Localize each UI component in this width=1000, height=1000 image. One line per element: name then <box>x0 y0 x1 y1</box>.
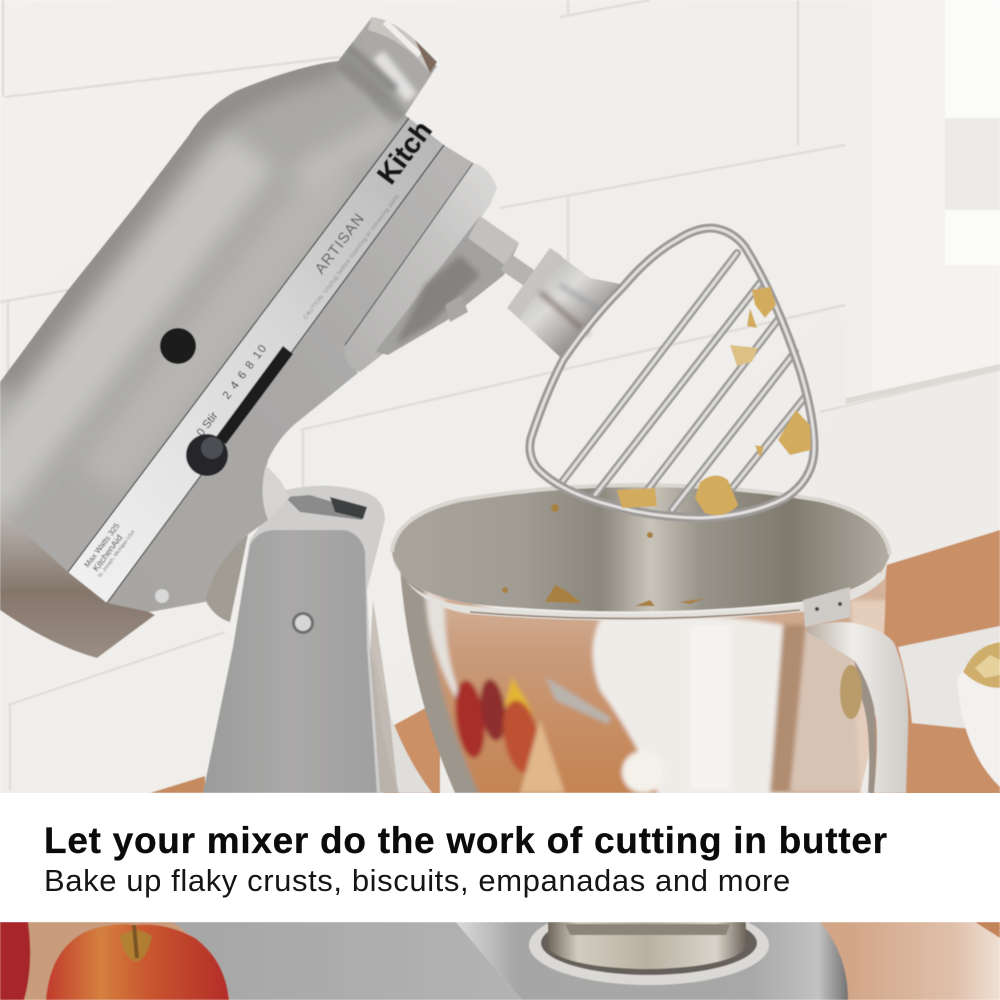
wooden counter <box>150 530 1000 800</box>
mixer head body <box>0 17 437 572</box>
subheading: Bake up flaky crusts, biscuits, empanadas and more <box>44 863 791 898</box>
counter below banner <box>0 922 1000 1000</box>
beater bars <box>562 253 805 510</box>
brand text: Kitch <box>371 115 438 190</box>
top cap <box>368 17 437 73</box>
silver trim band with labels: ARTISAN <box>312 210 368 277</box>
silver trim band with labels: St. Joseph, Michigan USA <box>97 529 137 579</box>
white caption banner <box>0 793 1000 922</box>
speed slider slot <box>216 346 293 444</box>
mixer base <box>172 922 849 1000</box>
butter crumbs on beater <box>617 287 811 515</box>
lower head <box>107 145 473 612</box>
silver trim band with labels: 2 4 6 8 10 <box>221 342 270 402</box>
apples <box>0 922 229 1000</box>
bowl handle <box>803 587 908 793</box>
tiled wall <box>0 0 1000 800</box>
speed dial <box>186 434 228 476</box>
beater collar <box>507 248 626 357</box>
bowl rim <box>394 558 888 621</box>
beater frame <box>530 228 814 518</box>
silver trim band with labels <box>68 115 444 603</box>
stand pin <box>292 612 314 634</box>
beater shaft <box>506 262 532 280</box>
mixer stand column <box>203 486 432 793</box>
window frame <box>815 0 1000 555</box>
silver trim band with labels: Max Watts 325 <box>82 521 122 569</box>
black knob <box>160 328 196 364</box>
headline: Let your mixer do the work of cutting in butter <box>44 820 888 861</box>
towel and bowl of crumbs <box>898 626 1000 787</box>
hood under head <box>0 510 155 658</box>
pastry beater <box>506 228 814 518</box>
silver trim band with labels: KitchenAid <box>91 533 124 573</box>
reflected apples <box>451 679 489 759</box>
bowl exterior reflections <box>400 572 886 793</box>
silver trim band with labels: CAUTION: Unplug before inserting or removing parts <box>303 194 401 321</box>
mixing bowl <box>392 485 895 800</box>
hinge disk <box>205 535 248 622</box>
crumbs inside bowl <box>502 504 705 606</box>
silver trim band with labels: 0 Stir <box>195 410 221 439</box>
neck ring and attachment hub <box>345 163 519 372</box>
